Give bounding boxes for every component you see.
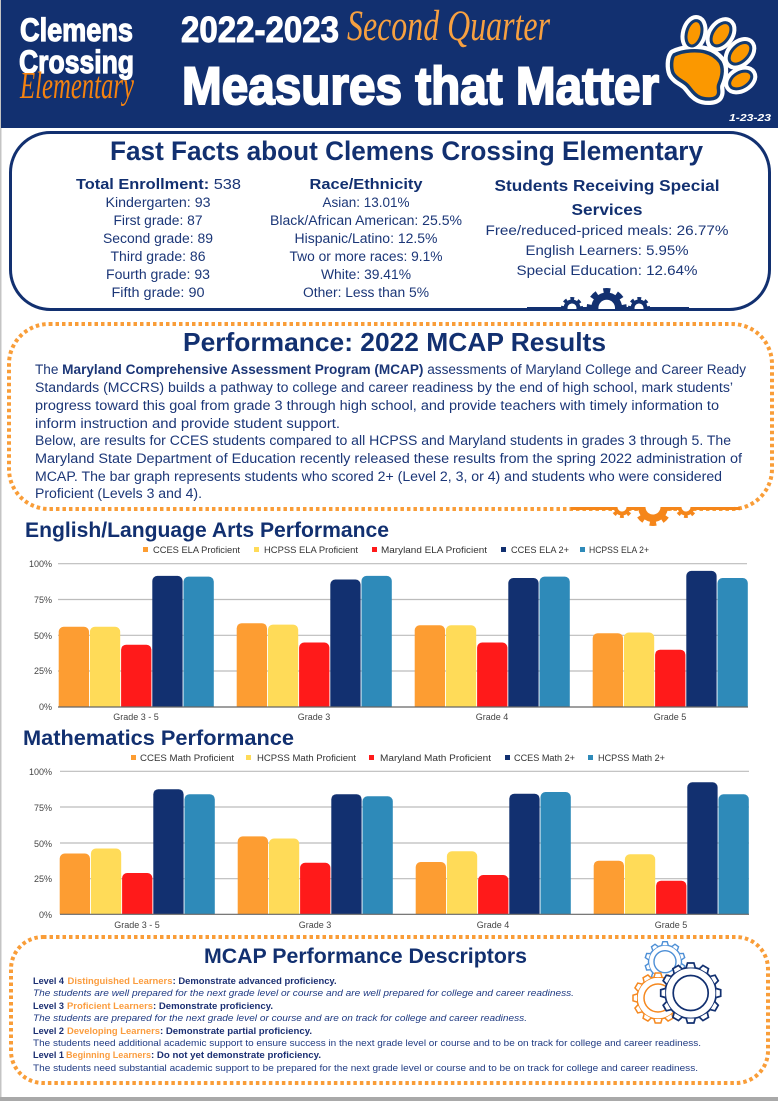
school name: Crossing	[19, 44, 134, 80]
panel: performance descriptors	[11, 937, 768, 1083]
school name: Clemens	[20, 12, 133, 48]
special services column: Special Education: 12.64%	[516, 262, 698, 278]
y axis: 75%	[34, 595, 52, 605]
description text	[35, 362, 746, 501]
description text: Proficient (Levels 3 and 4).	[35, 486, 202, 501]
legend: CCES Math 2+	[514, 753, 575, 763]
heading: ELA: English/Language Arts Performance	[25, 519, 389, 542]
panel: performance	[9, 324, 772, 526]
level 3: The students are prepared for the next grade level or course and are on track for college and career readiness.	[33, 1013, 527, 1024]
legend: CCES ELA 2+	[511, 545, 569, 555]
level 2: The students need additional academic support to ensure success in the next grade level or course and to be on track for college and career readiness.	[33, 1038, 701, 1049]
description text: inform instruction and provide student support.	[35, 416, 340, 431]
main title: Measures that Matter	[182, 57, 659, 116]
heading: descriptors: MCAP Performance Descriptors	[204, 945, 527, 968]
x axis: Grade 3 - 5	[114, 920, 160, 930]
y axis: 50%	[34, 839, 52, 849]
legend: CCES Math Proficient	[140, 753, 235, 763]
enrollment column: Total Enrollment: 538	[76, 176, 241, 193]
x axis: Grade 4	[476, 712, 508, 722]
y axis: 25%	[34, 666, 52, 676]
bar chart: math	[60, 782, 749, 914]
enrollment column: Kindergarten: 93	[106, 195, 210, 210]
special services column	[486, 178, 728, 278]
enrollment column	[76, 176, 241, 300]
icon: paw	[672, 19, 755, 99]
x axis: Grade 3	[299, 920, 331, 930]
x axis	[113, 712, 686, 722]
level 4: Distinguished Learners	[68, 976, 172, 987]
school name: Elementary	[19, 65, 134, 107]
x axis: Grade 3 - 5	[113, 712, 159, 722]
year: 2022-2023	[181, 9, 339, 50]
description text: Below, are results for CCES students compared to all HCPSS and Maryland students in grades 3 through 5. The	[35, 433, 731, 448]
level 4: Level 4	[33, 976, 65, 987]
level 3: : Demonstrate proficiency.	[153, 1001, 273, 1012]
race and ethnicity column	[270, 176, 462, 300]
y axis: 75%	[34, 803, 52, 813]
level 1: : Do not yet demonstrate proficiency.	[151, 1050, 321, 1061]
legend: CCES ELA Proficient	[153, 545, 241, 555]
level 3: Proficient Learners	[67, 1001, 153, 1012]
level 2: Developing Learners	[67, 1026, 160, 1037]
description text: The Maryland Comprehensive Assessment Program (MCAP) assessments of Maryland College and Career Ready	[35, 362, 746, 377]
panel: ELA chart	[26, 522, 748, 720]
level 1: Level 1	[33, 1050, 65, 1061]
legend: Maryland Math Proficient	[380, 753, 492, 763]
level 4	[33, 976, 574, 999]
x axis: Grade 5	[654, 712, 686, 722]
race and ethnicity column: Hispanic/Latino: 12.5%	[294, 231, 438, 246]
legend: HCPSS Math 2+	[598, 753, 665, 763]
race and ethnicity column: Two or more races: 9.1%	[290, 249, 442, 264]
panel: math chart	[24, 730, 749, 928]
y axis: 100%	[29, 559, 52, 569]
y axis: 25%	[34, 874, 52, 884]
header banner	[1, 0, 778, 128]
legend	[143, 545, 649, 555]
level 1: Beginning Learners	[66, 1050, 151, 1061]
bar chart: ELA	[58, 570, 748, 706]
level 3: Level 3	[33, 1001, 64, 1012]
race and ethnicity column: White: 39.41%	[321, 267, 411, 282]
special services column: Services	[572, 202, 643, 219]
legend: HCPSS Math Proficient	[257, 753, 357, 763]
description text: Maryland State Department of Education recently released these results from the spring 2022 administration of	[35, 451, 742, 466]
level 4: The students are well prepared for the next grade level or course and are well prepared for college and career readiness.	[33, 988, 574, 999]
level 3	[33, 1001, 527, 1024]
legend: HCPSS ELA 2+	[589, 545, 649, 555]
legend: HCPSS ELA Proficient	[264, 545, 359, 555]
icon: orange gears	[571, 507, 740, 526]
enrollment column: First grade: 87	[114, 213, 202, 228]
enrollment column: Third grade: 86	[110, 249, 206, 264]
quarter: Second Quarter	[347, 3, 550, 50]
panel: fast facts	[10, 132, 770, 329]
y axis	[29, 559, 52, 712]
race and ethnicity column: Other: Less than 5%	[303, 285, 429, 300]
enrollment column: Fourth grade: 93	[106, 267, 210, 282]
level 2	[33, 1026, 701, 1049]
description text: progress toward this goal from grade 3 through high school, and provide teachers with timely information to	[35, 398, 719, 413]
y axis: 100%	[29, 767, 52, 777]
legend	[131, 753, 665, 763]
y axis: 0%	[39, 910, 52, 920]
heading: fast facts: Fast Facts about Clemens Crossing Elementary	[110, 136, 703, 166]
heading: performance: Performance: 2022 MCAP Results	[183, 327, 606, 357]
race and ethnicity column: Race/Ethnicity	[310, 176, 423, 193]
enrollment column: Second grade: 89	[103, 231, 213, 246]
special services column: Students Receiving Special	[494, 178, 720, 195]
special services column: Free/reduced-priced meals: 26.77%	[486, 222, 728, 238]
icon: three outline gears	[633, 942, 721, 1023]
description text: MCAP. The bar graph represents students who scored 2+ (Level 2, 3, or 4) and students who were considered	[35, 469, 722, 484]
legend: Maryland ELA Proficient	[381, 545, 488, 555]
level 1: The students need substantial academic support to be prepared for the next grade level or course and to be on track for college and career readiness.	[33, 1063, 698, 1074]
enrollment column: Fifth grade: 90	[112, 285, 204, 300]
x axis	[114, 920, 687, 930]
x axis: Grade 3	[298, 712, 330, 722]
race and ethnicity column: Asian: 13.01%	[322, 195, 410, 210]
description text: Standards (MCCRS) builds a pathway to college and career readiness by the end of high school, mark students’	[35, 380, 733, 395]
y axis	[29, 767, 52, 920]
special services column: English Learners: 5.95%	[526, 242, 688, 258]
level 1	[33, 1050, 698, 1074]
heading: math: Mathematics Performance	[23, 727, 294, 750]
y axis: 0%	[39, 702, 52, 712]
level 4: : Demonstrate advanced proficiency.	[173, 976, 337, 987]
race and ethnicity column: Black/African American: 25.5%	[270, 213, 462, 228]
y axis: 50%	[34, 631, 52, 641]
x axis: Grade 5	[655, 920, 687, 930]
level 2: Level 2	[33, 1026, 64, 1037]
icon: gears	[527, 288, 689, 309]
level 2: : Demonstrate partial proficiency.	[160, 1026, 312, 1037]
school name	[19, 12, 134, 107]
x axis: Grade 4	[477, 920, 509, 930]
date: 1-23-23	[729, 112, 771, 124]
